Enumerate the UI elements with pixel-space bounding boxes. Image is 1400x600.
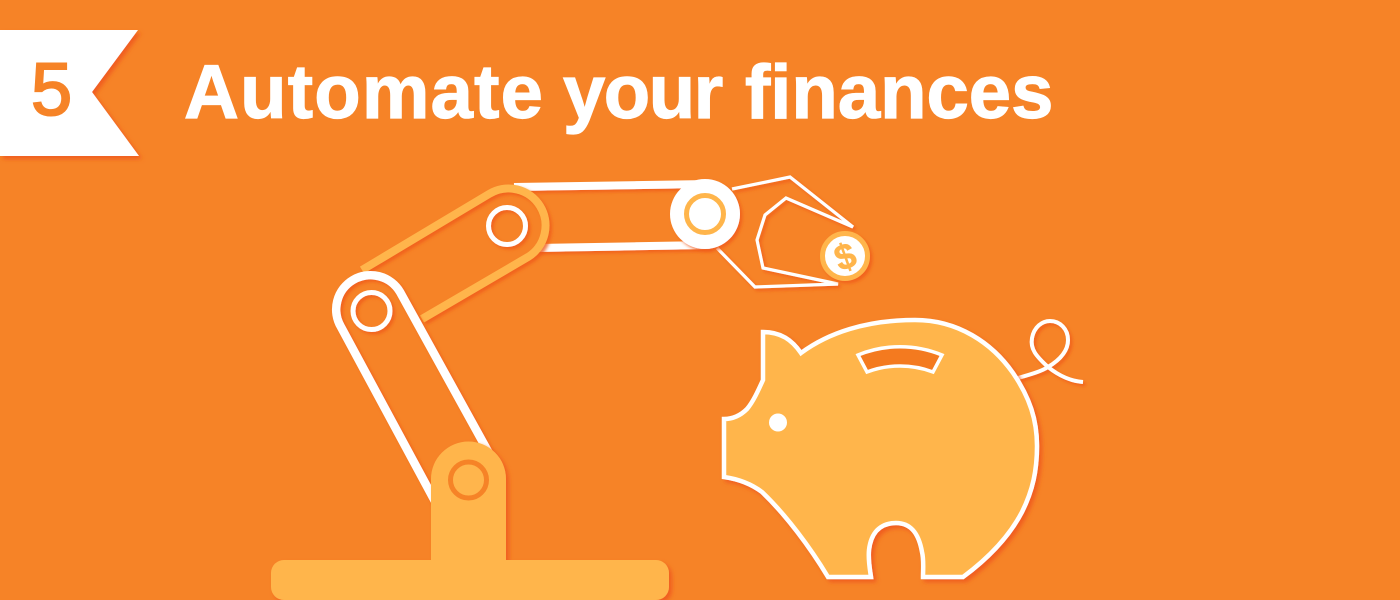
number flag badge: 5 (31, 48, 72, 131)
piggy bank (724, 320, 1083, 577)
number flag badge (0, 30, 139, 156)
wrist joint (670, 179, 740, 249)
pig eye (769, 414, 787, 432)
base joint ring (450, 462, 486, 498)
forearm band (514, 184, 710, 248)
gripper claw (717, 177, 853, 287)
pig tail (1018, 321, 1083, 382)
pig body (724, 320, 1037, 577)
title: your (563, 50, 723, 135)
robot arm (271, 177, 853, 600)
title: finances (745, 50, 1053, 135)
robot base (271, 442, 669, 600)
title: Automate (184, 50, 544, 135)
upper arm segment (362, 188, 546, 319)
dollar coin: $ (829, 234, 862, 279)
coin slot (858, 347, 942, 372)
lower arm segment (336, 275, 490, 505)
